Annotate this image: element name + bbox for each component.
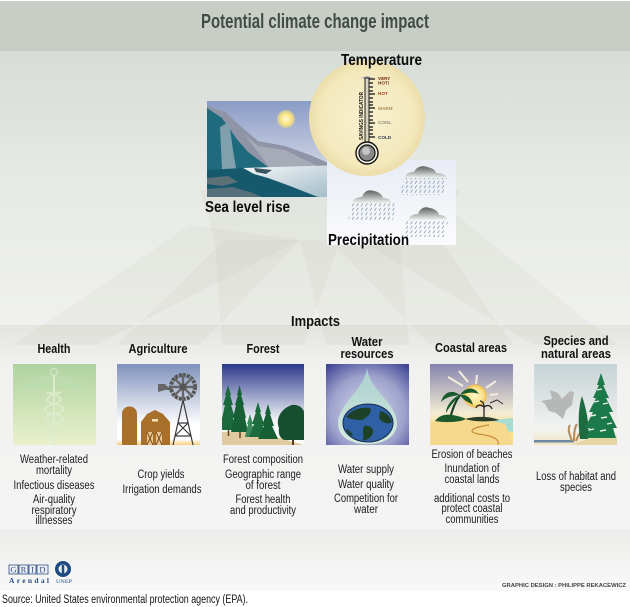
panel: species and natural areas bbox=[534, 333, 617, 494]
text: forest impacts: Forest composition bbox=[223, 454, 303, 466]
text: health impacts: mortality bbox=[36, 465, 72, 477]
illustration: precipitation bbox=[327, 160, 456, 245]
text: agriculture impacts: Crop yields bbox=[138, 469, 185, 481]
icon: thermometer: WARM bbox=[378, 106, 393, 111]
text: coastal impacts: protect coastal bbox=[442, 503, 502, 515]
text: forest impacts: Geographic range bbox=[225, 469, 301, 481]
panel: species and natural areas: Species and bbox=[544, 333, 609, 348]
credit: graphic design: GRAPHIC DESIGN : PHILIPPE REKACEWICZ bbox=[502, 583, 627, 589]
text: water impacts bbox=[334, 464, 398, 516]
text: forest impacts: Forest health bbox=[236, 494, 290, 506]
text: forest impacts: of forest bbox=[246, 480, 281, 492]
text: health impacts: Infectious diseases bbox=[14, 480, 95, 492]
heading: sea level rise: Sea level rise bbox=[205, 199, 290, 216]
text: agriculture impacts: Irrigation demands bbox=[122, 484, 202, 496]
text: coastal impacts: additional costs to bbox=[434, 493, 510, 505]
panel: agriculture bbox=[117, 341, 202, 496]
logo: GRID Arendal: R bbox=[21, 564, 27, 574]
logo: UNEP bbox=[55, 561, 72, 585]
connecting beams from climate factors to impacts bbox=[13, 190, 617, 345]
text: water impacts: water bbox=[353, 504, 378, 516]
panel: health bbox=[13, 341, 96, 527]
icon: rain cloud bbox=[402, 207, 448, 237]
logo: GRID Arendal bbox=[9, 564, 49, 585]
text: coastal impacts: Erosion of beaches bbox=[432, 449, 513, 461]
icon: beach with palm trees bbox=[430, 364, 513, 445]
icon: thermometer: SAVINGS INDICATOR bbox=[359, 92, 365, 140]
logo: GRID Arendal: G bbox=[10, 564, 17, 574]
icon: forest bbox=[222, 364, 304, 445]
text: water impacts: Water quality bbox=[338, 479, 394, 491]
text: water impacts: Water supply bbox=[338, 464, 394, 476]
text: coastal impacts: Inundation of bbox=[444, 463, 500, 475]
text: agriculture impacts bbox=[122, 469, 202, 496]
icon: water drop with globe bbox=[326, 364, 409, 445]
logo: GRID Arendal: I bbox=[31, 564, 34, 574]
text: health impacts: respiratory bbox=[32, 505, 77, 517]
panel: forest bbox=[222, 341, 304, 517]
panel: health: Health bbox=[38, 341, 71, 356]
text: health impacts bbox=[14, 454, 95, 527]
heading: temperature: Temperature bbox=[341, 52, 422, 69]
icon: bird and trees bbox=[534, 364, 617, 445]
text: coastal impacts bbox=[432, 449, 513, 526]
text: species impacts: species bbox=[560, 482, 592, 494]
text: coastal impacts: communities bbox=[446, 514, 499, 526]
panel: water resources: resources bbox=[340, 346, 394, 361]
panel: agriculture: Agriculture bbox=[128, 341, 188, 356]
icon: thermometer: COOL bbox=[378, 120, 391, 125]
logo: UNEP: UNEP bbox=[56, 579, 72, 585]
heading: precipitation: Precipitation bbox=[328, 232, 409, 249]
illustration: sea level rise bbox=[207, 101, 342, 197]
text: forest impacts bbox=[223, 454, 303, 517]
logo: GRID Arendal: Arendal bbox=[9, 576, 49, 585]
icon: rain cloud bbox=[400, 166, 447, 195]
icon: rain cloud bbox=[348, 190, 397, 220]
text: coastal impacts: coastal lands bbox=[444, 474, 500, 486]
title: Potential climate change impact bbox=[201, 11, 429, 33]
title band bbox=[0, 1, 630, 51]
panel: species and natural areas: natural areas bbox=[541, 346, 611, 361]
text: health impacts: illnesses bbox=[36, 515, 73, 527]
text: health impacts: Air-quality bbox=[33, 494, 75, 506]
panel: water resources: Water bbox=[352, 334, 382, 349]
panel: coastal areas bbox=[430, 340, 513, 526]
panel: water resources bbox=[326, 334, 409, 516]
icon: farm with windmill bbox=[117, 364, 200, 445]
panel: coastal areas: Coastal areas bbox=[435, 340, 507, 355]
icon: thermometer: HOT! bbox=[378, 80, 390, 86]
icon: caduceus bbox=[13, 364, 96, 445]
text: health impacts: Weather-related bbox=[20, 454, 88, 466]
icon: small sun bbox=[277, 110, 295, 128]
icon: thermometer: VERY bbox=[378, 76, 390, 81]
text: forest impacts: and productivity bbox=[230, 505, 296, 517]
heading: impacts: Impacts bbox=[291, 313, 340, 330]
temperature disc bbox=[309, 60, 425, 176]
source note: Source: United States environmental protection agency (EPA). bbox=[2, 594, 248, 606]
panel: forest: Forest bbox=[246, 341, 280, 356]
text: species impacts bbox=[536, 471, 616, 494]
icon: thermometer bbox=[356, 76, 393, 164]
logo: GRID Arendal: D bbox=[39, 564, 46, 574]
icon: thermometer: HOT bbox=[378, 91, 388, 96]
icon: thermometer: COLD bbox=[378, 135, 392, 140]
text: water impacts: Competition for bbox=[334, 493, 398, 505]
